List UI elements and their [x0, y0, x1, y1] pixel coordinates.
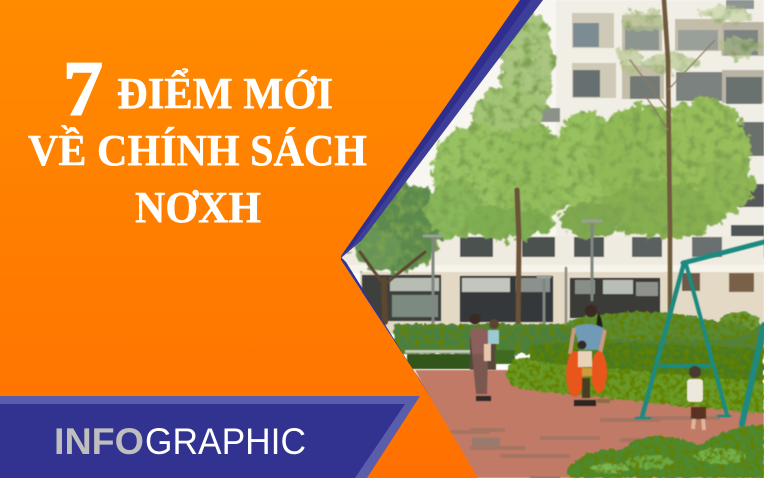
foreground leaves [566, 425, 764, 478]
grandmother with child [470, 314, 499, 401]
title line 2: VỀ CHÍNH SÁCH [28, 125, 367, 175]
tree trunks and lamp posts [360, 0, 715, 345]
banner light frame [0, 396, 420, 478]
toddler near swing [687, 366, 706, 430]
banner: infographic [0, 396, 420, 478]
hedges [506, 342, 764, 414]
orange spring rocker [566, 340, 607, 406]
low hedge and bench rail [405, 338, 515, 370]
banner dark fill [0, 404, 405, 478]
diagonal blue stripe [341, 0, 543, 400]
banner label: INFO [54, 421, 144, 462]
title line 3: NƠXH [135, 183, 261, 232]
title line 1: ĐIỂM MỚI [117, 67, 333, 118]
orange background panel [0, 0, 520, 478]
swing set [636, 242, 764, 424]
trees [351, 9, 752, 273]
ground floor windows [362, 275, 660, 322]
banner label: GRAPHIC [145, 421, 306, 462]
title [28, 45, 367, 232]
people at the playground [470, 305, 706, 430]
background shrubs [394, 312, 764, 354]
ground floor wall [340, 236, 764, 334]
photo: apartment courtyard [340, 0, 764, 478]
numeral 7: 7 [63, 45, 103, 132]
paved courtyard [415, 370, 764, 478]
building upper floors [340, 0, 764, 270]
woman behind rocker [570, 305, 610, 403]
sparse upper leaves [618, 6, 762, 75]
